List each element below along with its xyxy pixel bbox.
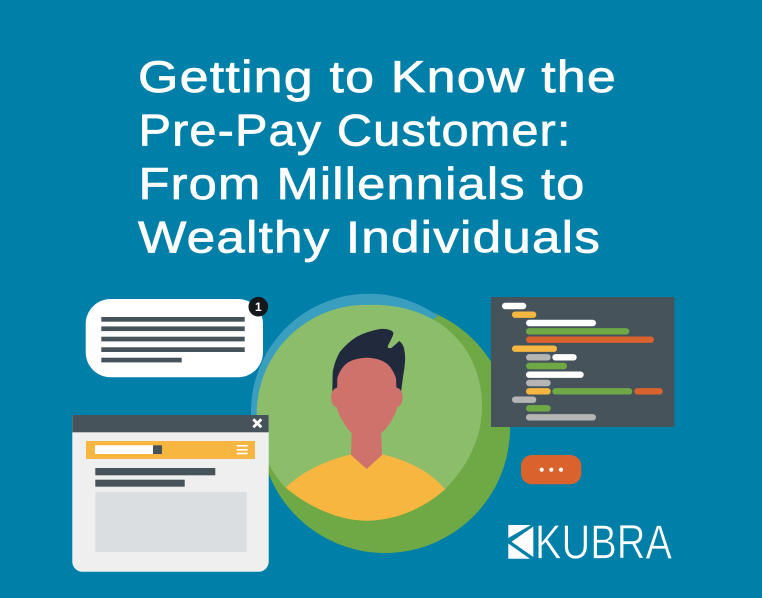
person avatar with circles xyxy=(251,294,510,553)
logo wordmark: KUBRA xyxy=(535,516,673,570)
KUBRA logo xyxy=(508,516,673,570)
notification badge xyxy=(248,297,268,317)
window body xyxy=(72,415,269,572)
orange chat pill xyxy=(521,455,581,484)
notification badge: 1 xyxy=(255,300,262,314)
logo mark xyxy=(508,525,533,559)
circle: dark green xyxy=(260,303,510,553)
hair xyxy=(332,329,405,392)
browser window xyxy=(72,415,269,572)
title: From Millennials to xyxy=(138,160,586,209)
title xyxy=(138,53,617,262)
title bar xyxy=(72,415,269,432)
speech bubble with notification xyxy=(86,297,268,377)
face and neck xyxy=(337,358,397,469)
bubble body xyxy=(86,299,263,377)
shirt xyxy=(286,454,445,521)
code lines xyxy=(502,303,663,420)
title: Pre-Pay Customer: xyxy=(138,107,572,156)
icon: close x xyxy=(253,419,261,427)
code panel xyxy=(491,297,674,427)
image placeholder xyxy=(95,492,247,552)
ears xyxy=(331,388,345,408)
bubble text lines xyxy=(101,317,245,362)
circle: light green xyxy=(257,305,482,489)
window text lines xyxy=(95,468,215,487)
orange toolbar xyxy=(86,441,255,459)
title: Wealthy Individuals xyxy=(138,214,601,262)
title: Getting to Know the xyxy=(138,53,617,102)
circle: light blue xyxy=(251,294,438,440)
